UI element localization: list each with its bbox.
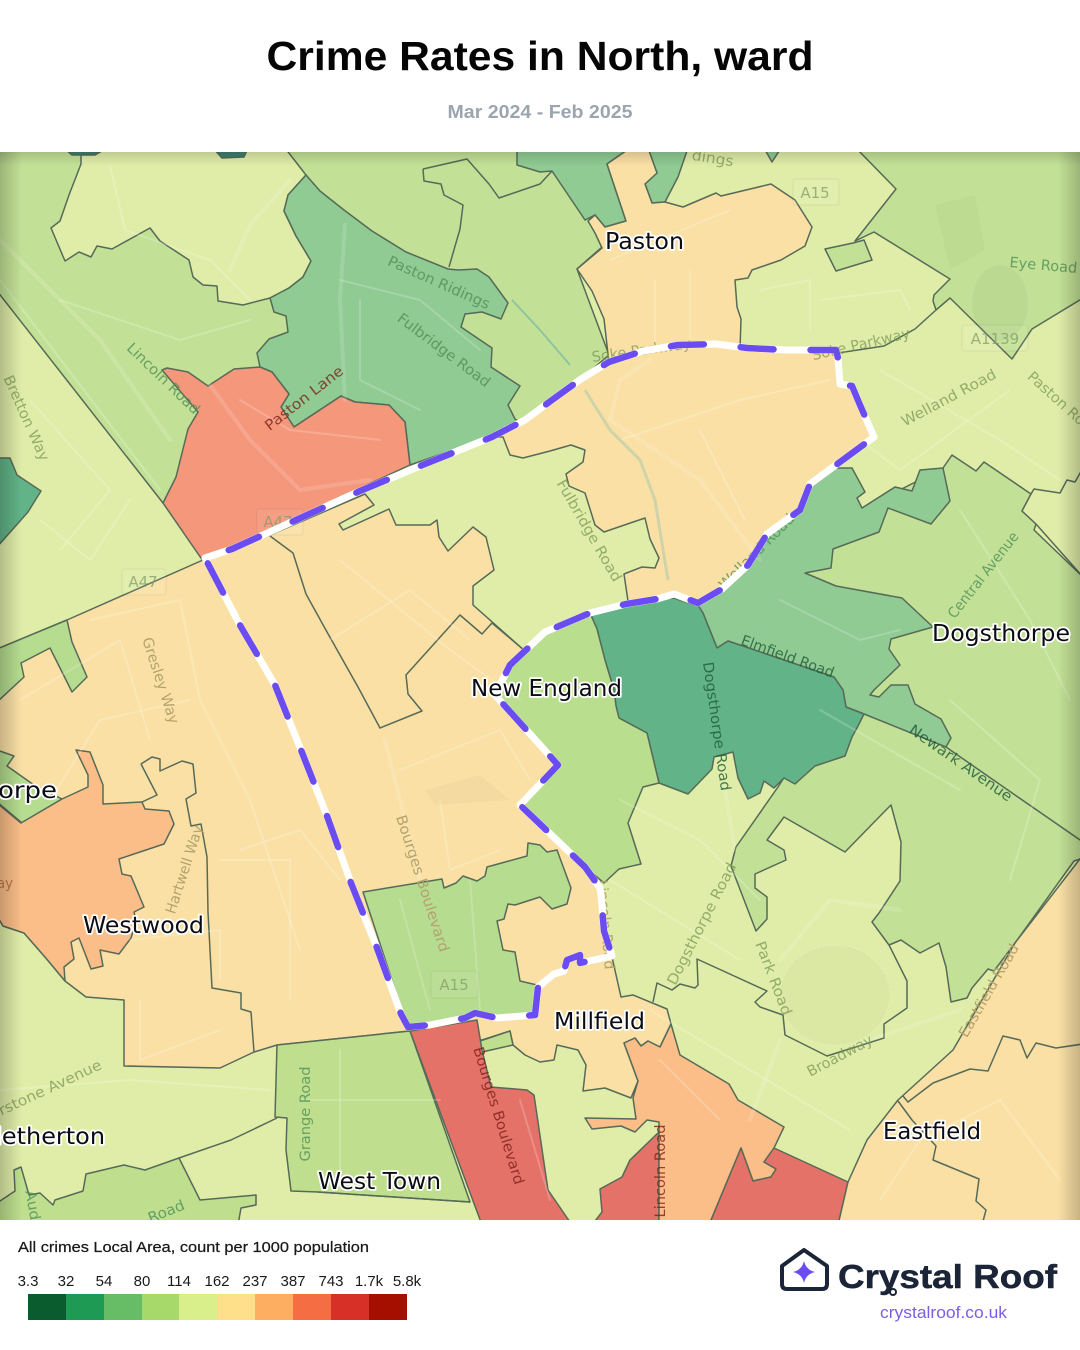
legend scale labels: 5.8k [393,1273,422,1290]
faint street network [0,165,1070,1200]
road labels: Soke Parkway [591,336,692,366]
road labels: Lincoln Road [653,1124,669,1218]
area polygons [0,148,1080,1225]
place labels: Paston [605,229,684,255]
road shields: A47 [128,573,158,591]
road labels: Paston Lane [262,363,347,434]
vignette: top edge [0,152,1080,162]
map base: lightest green area [0,152,1080,1220]
legend scale labels: 162 [204,1273,230,1290]
road labels: Paston Ridings [385,254,492,313]
subtitle: date range: Mar 2024 - Feb 2025 [448,102,632,122]
road labels: Eye Road [1009,255,1078,277]
stream lines [512,300,570,365]
road labels: Welland Road [716,511,798,593]
legend scale labels: 3.3 [18,1273,38,1290]
place labels: New England [471,676,622,702]
road labels: Bourges Boulevard [392,813,452,954]
road labels: Elmfield Road [739,633,836,682]
road labels: dings [691,148,735,170]
road labels: Eastfield Road [956,942,1023,1040]
road shields [122,179,1028,998]
title: Crime Rates in North, ward [266,33,814,79]
road labels: Central Avenue [945,529,1023,622]
road labels: Dogsthorpe Road [699,661,733,792]
legend scale labels [18,1273,422,1290]
legend scale labels: 32 [58,1273,74,1290]
road labels: Grange Road [298,1066,314,1162]
road labels: Lincoln Road [123,340,203,418]
legend scale labels: 743 [318,1273,344,1290]
place labels: Eastfield [883,1119,981,1145]
place labels: Westwood [83,913,204,939]
road labels: Bourges Boulevard [469,1045,526,1187]
ward boundary: white casing [205,344,874,1027]
legend scale labels: 237 [242,1273,268,1290]
place labels: West Town [318,1169,441,1195]
road labels: Road [146,1198,187,1227]
road labels: Soke Parkway [811,326,912,364]
road labels: Lincoln Road [593,879,617,970]
road labels: Hartwell Way [163,823,207,916]
road labels: Fulbridge Road [394,311,493,391]
legend scale labels: 387 [280,1273,306,1290]
icon: house with star [782,1250,827,1289]
logo: Crystal Roof [782,1250,1058,1322]
logo key detail [890,1289,896,1295]
road labels: Gresley Way [138,635,181,726]
ward boundary: purple dashes [205,344,874,1027]
place labels [0,229,1070,1195]
choropleth map [0,148,1080,1227]
road labels: Bretton Way [0,373,52,464]
place labels: Dogsthorpe [932,621,1070,647]
road shields: A15 [800,184,830,202]
legend title: All crimes Local Area, count per 1000 population [18,1239,369,1256]
place labels: Millfield [554,1009,645,1035]
road labels: Aud [21,1189,42,1221]
vignette: left edge [0,152,18,1220]
road labels: Fulbridge Road [553,477,624,585]
road shields: A1139 [971,330,1019,348]
road shields: A47 [263,513,293,531]
website url: crystalroof.co.uk [880,1304,1008,1322]
road shields: A15 [439,976,469,994]
road labels: Welland Road [899,367,999,430]
road labels: Newark Avenue [906,722,1015,805]
road labels: Broadway [805,1032,876,1080]
vignette: right edge [1062,152,1080,1220]
legend scale labels: 80 [134,1273,150,1290]
brook through ward [585,390,668,580]
logo wordmark: Crystal Roof [838,1258,1058,1295]
road labels: Park Road [751,939,794,1018]
road labels [0,148,1080,1227]
road labels: Dogsthorpe Road [665,860,740,988]
legend scale labels: 114 [167,1273,191,1290]
legend [18,1239,422,1320]
legend scale labels: 1.7k [355,1273,384,1290]
legend colour scale [28,1294,407,1320]
legend scale labels: 54 [96,1273,112,1290]
